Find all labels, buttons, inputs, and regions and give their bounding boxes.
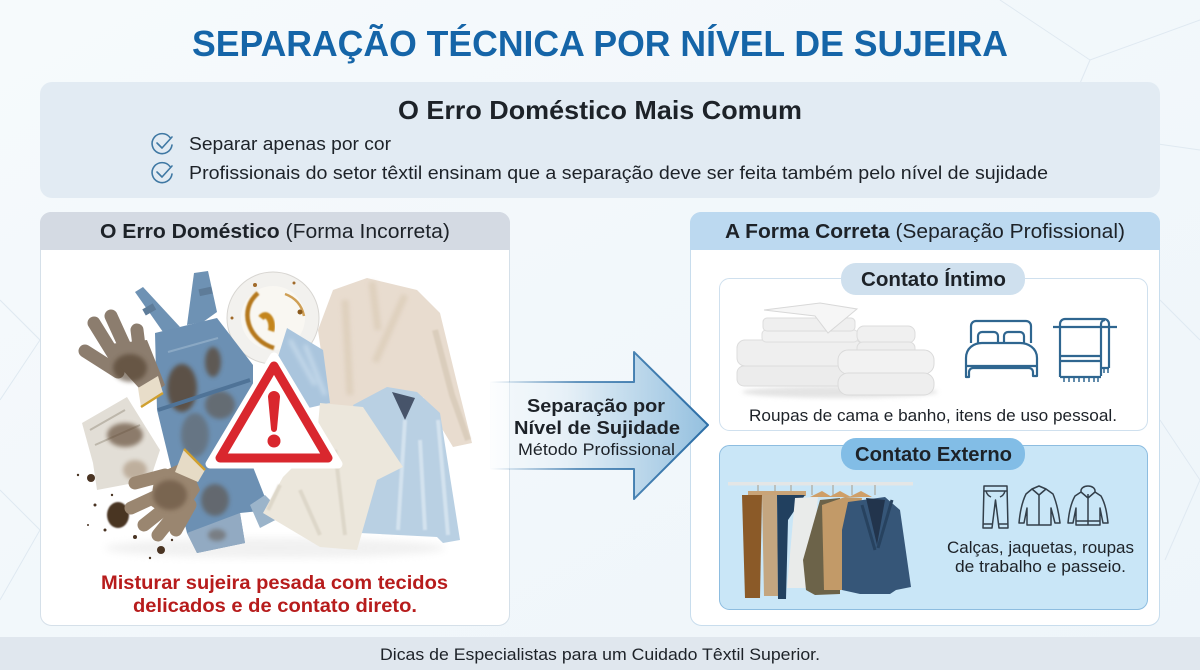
panel: correct way	[690, 212, 1160, 626]
pill: external contact: Contato Externo	[855, 444, 1012, 466]
dirty glove bottom	[131, 449, 205, 535]
bullet: soil level: Profissionais do setor têxtil ensinam que a separação deve ser feita também pelo nível de sujidade	[189, 163, 1048, 183]
icon: warning triangle	[210, 357, 338, 464]
text: external contact: Calças, jaquetas, roupas	[947, 538, 1134, 557]
panel header: correct way	[690, 212, 1160, 250]
icon: bed	[966, 321, 1037, 377]
card: external contact	[720, 438, 1148, 610]
dirt	[77, 474, 173, 559]
text: intimate contact: Roupas de cama e banho, itens de uso pessoal.	[749, 406, 1117, 425]
arrow: separation method: Método Profissional	[518, 441, 675, 459]
panel header: wrong way: O Erro Doméstico (Forma Incorreta)	[100, 221, 450, 243]
icon: towel rack	[1053, 319, 1117, 382]
title: SEPARAÇÃO TÉCNICA POR NÍVEL DE SUJEIRA	[192, 22, 1008, 64]
pill: external contact	[841, 438, 1025, 470]
card: intimate contact	[720, 263, 1148, 430]
bullet: color only: Separar apenas por cor	[189, 134, 391, 154]
overalls	[135, 271, 285, 553]
blue cloth	[277, 328, 330, 410]
stained rag	[82, 397, 160, 490]
panel: common mistake	[40, 82, 1160, 198]
illustration: folded linens	[737, 303, 938, 398]
pill: intimate contact	[841, 263, 1025, 295]
footer: Dicas de Especialistas para um Cuidado Têxtil Superior.	[380, 645, 820, 664]
pill: intimate contact: Contato Íntimo	[861, 268, 1006, 291]
illustration: mixed dirty and delicate clothes	[77, 271, 472, 559]
caption: warning	[101, 573, 448, 617]
panel: wrong way	[40, 212, 510, 626]
caption: warning: Misturar sujeira pesada com tecidos	[101, 573, 448, 594]
cream blouse	[263, 403, 403, 550]
icon: jacket	[1068, 486, 1108, 525]
icon: check two	[152, 163, 172, 183]
panel header: wrong way	[40, 212, 510, 250]
arrow: separation method	[490, 352, 708, 499]
beige blouse	[318, 278, 472, 447]
illustration: clothes on a rail	[728, 482, 913, 599]
icon: shirt	[1019, 486, 1060, 525]
icon: check one	[152, 134, 172, 154]
dirty glove top	[85, 316, 165, 407]
icon: trousers	[983, 486, 1008, 528]
caption: warning: delicados e de contato direto.	[133, 596, 417, 617]
footer	[0, 637, 1200, 670]
heading: common mistake: O Erro Doméstico Mais Comum	[398, 95, 802, 125]
plate	[227, 272, 319, 364]
text: external contact: de trabalho e passeio.	[955, 557, 1126, 576]
arrow: separation method: Separação por	[527, 396, 665, 416]
panel header: correct way: A Forma Correta (Separação Profissional)	[725, 221, 1125, 243]
text: external contact	[947, 538, 1134, 576]
blue blouse	[353, 387, 460, 543]
arrow: separation method: Nível de Sujidade	[514, 418, 680, 438]
